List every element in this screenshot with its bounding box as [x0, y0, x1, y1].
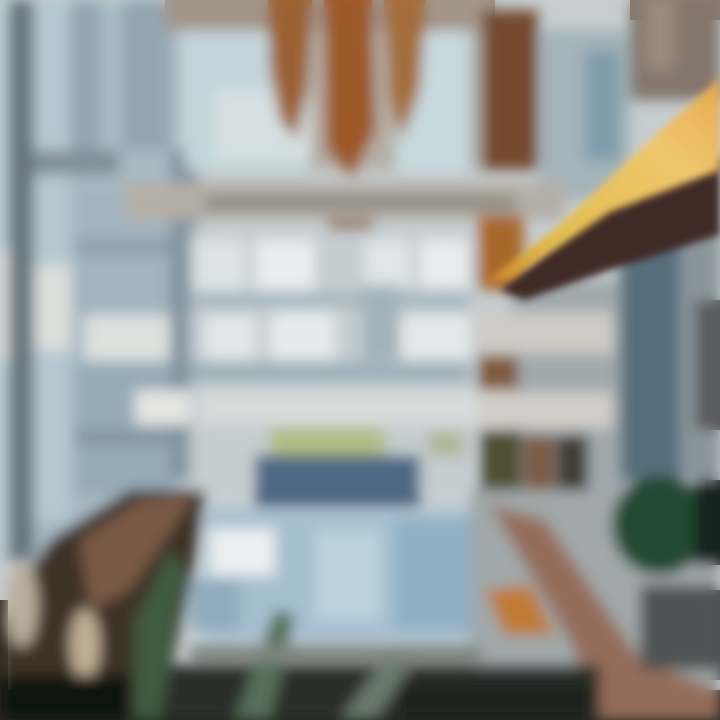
horizontal beam — [125, 182, 565, 220]
floor walkway — [470, 490, 720, 720]
foreground plants — [0, 490, 600, 720]
right column lower — [478, 215, 613, 505]
plant right — [612, 475, 720, 575]
ceiling and top windows — [165, 0, 495, 170]
lounge and lower windows — [190, 428, 475, 640]
diagonal yellow beam — [486, 78, 720, 300]
upper right column and facade — [482, 0, 720, 500]
pendant lights — [268, 0, 426, 262]
central glazing — [190, 230, 480, 490]
left facade — [0, 0, 205, 560]
